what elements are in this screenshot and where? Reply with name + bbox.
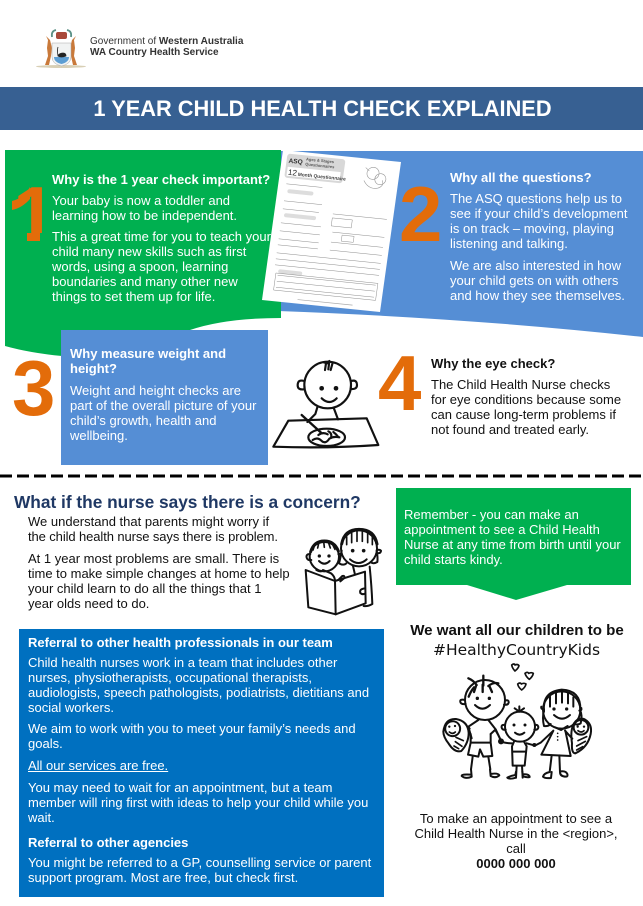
panel 4 heading: Why the eye check? [431, 356, 555, 371]
heading: what if the nurse says there is a concern: What if the nurse says there is a concern? [14, 492, 361, 512]
panel 1 text: Why is the 1 year check important? [52, 172, 270, 187]
referral team text: audiologists, speech pathologists, podiatrists, dietitians and [28, 685, 369, 700]
callout: remember: appointment to see a Child Health [404, 522, 600, 537]
panel 2 text: We are also interested in how [450, 258, 621, 273]
appointment contact text: 0000 000 000 [476, 856, 556, 871]
callout: remember: child starts kindy. [404, 552, 503, 567]
panel 2 background: why all the questions [281, 151, 643, 337]
callout: remember: Nurse at any time from birth until your [404, 537, 621, 552]
ASQ questionnaire form image: Ages & Stages [306, 156, 335, 164]
panel 4 text: can cause long-term problems if [431, 407, 616, 422]
referral heading: Referral to other health professionals in our team [28, 635, 333, 650]
title: 1 YEAR CHILD HEALTH CHECK EXPLAINED [93, 96, 552, 121]
icon: two children reading a book [304, 528, 382, 616]
waiting text: wait. [28, 810, 55, 825]
agencies text: support program. Most are free, but check first. [28, 870, 298, 885]
referral goals text: We aim to work with you to meet your family’s needs and [28, 721, 356, 736]
panel 1 background: why the check is important [5, 150, 281, 356]
number 2: 2 [399, 170, 442, 258]
number 4: 4 [378, 339, 421, 427]
panel 4 text: not found and treated early. [431, 422, 589, 437]
referral goals text [28, 721, 356, 751]
panel 3 heading [70, 346, 226, 376]
panel 1 text: Your baby is now a toddler and [52, 193, 230, 208]
ASQ questionnaire form image: ASQ [288, 158, 303, 166]
concern text block: time to make simple changes at home to help [28, 566, 290, 581]
panel 2 text: Why all the questions? [450, 170, 592, 185]
title banner [0, 87, 643, 130]
number 1 [12, 187, 42, 241]
panel 3 text: child’s growth, health and [70, 413, 216, 428]
panel 1 text: boundaries and many other new [52, 274, 238, 289]
icon: family of stick children with babies and hearts [442, 663, 592, 780]
number 1: 1 [13, 170, 56, 258]
hashtag: #HealthyCountryKids [433, 641, 600, 659]
callout: remember: Remember - you can make an [404, 507, 579, 522]
panel: referral information [19, 629, 384, 897]
panel 2 text: and how they see themselves. [450, 288, 625, 303]
concern text block [28, 514, 290, 611]
concern text block: At 1 year most problems are small. There is [28, 551, 279, 566]
panel 2 text: see if your child’s development [450, 206, 628, 221]
appointment contact text: Child Health Nurse in the <region>, [414, 826, 618, 841]
waiting text: You may need to wait for an appointment, but a team [28, 780, 332, 795]
icon: child eating at table [272, 360, 380, 448]
panel 1 text [52, 172, 271, 304]
ASQ questionnaire form image: Month Questionnaire [297, 172, 346, 183]
concern text block: year olds need to do. [28, 596, 149, 611]
panel 3 heading: height? [70, 361, 117, 376]
panel 2 text: is on track – moving, playing [450, 221, 614, 236]
panel 3 text [70, 383, 256, 443]
ASQ questionnaire form image: 12 [287, 168, 298, 178]
panel 4 text: for eye conditions because some [431, 392, 621, 407]
free services text: All our services are free. [28, 758, 168, 773]
ASQ questionnaire form image [262, 151, 401, 312]
slogan heading: We want all our children to be [410, 622, 624, 639]
concern text block: We understand that parents might worry if [28, 514, 269, 529]
panel 3 heading: Why measure weight and [70, 346, 226, 361]
panel 3 text: Weight and height checks are [70, 383, 241, 398]
logo: Government of Western Australia: Government of Western Australia [90, 36, 244, 47]
waiting text: member will ring first with ideas to help your child while you [28, 795, 368, 810]
appointment contact text [414, 811, 618, 871]
logo: Government of Western Australia [36, 29, 244, 68]
referral goals text: goals. [28, 736, 63, 751]
referral team text: Child health nurses work in a team that includes other [28, 655, 337, 670]
waiting text [28, 780, 368, 825]
panel 4 text [431, 377, 621, 437]
panel 2 text: The ASQ questions help us to [450, 191, 622, 206]
panel 1 text: learning how to be independent. [52, 208, 237, 223]
panel 3 text: part of the overall picture of your [70, 398, 256, 413]
concern text block: the child health nurse says there is problem. [28, 529, 278, 544]
panel 1 text: words, using a spoon, learning [52, 259, 228, 274]
panel 2 text: listening and talking. [450, 236, 568, 251]
panel 1 text: child many new skills such as first [52, 244, 246, 259]
ASQ questionnaire form image: Questionnaires [305, 161, 336, 169]
concern text block: your child learn to do all the things that 1 [28, 581, 261, 596]
panel 4 text: The Child Health Nurse checks [431, 377, 610, 392]
panel 2 text [450, 170, 628, 303]
panel 3: weight and height [61, 330, 268, 465]
panel 4: eye check [431, 356, 621, 437]
panel 3 text: wellbeing. [70, 428, 128, 443]
callout: remember [396, 488, 631, 600]
number 3: 3 [12, 344, 55, 432]
referral team text: social workers. [28, 700, 114, 715]
appointment contact text: call [506, 841, 526, 856]
logo: Government of Western Australia: WA Country Health Service [90, 47, 219, 58]
agencies text: You might be referred to a GP, counselling service or parent [28, 855, 371, 870]
panel 1 text: This a great time for you to teach your [52, 229, 271, 244]
referral team text: nurses, physiotherapists, occupational therapists, [28, 670, 312, 685]
panel 1 text: things to set them up for life. [52, 289, 215, 304]
agencies heading: Referral to other agencies [28, 835, 188, 850]
agencies text [28, 855, 372, 885]
referral team text [28, 655, 369, 715]
appointment contact text: To make an appointment to see a [420, 811, 612, 826]
icon: coat of arms [36, 30, 86, 68]
panel 2 text: your child gets on with others [450, 273, 618, 288]
